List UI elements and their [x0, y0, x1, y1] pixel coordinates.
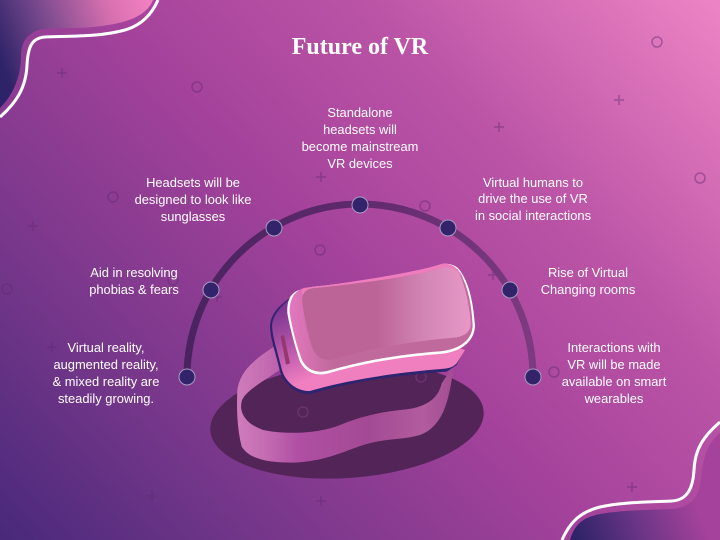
text: growth: steadily growing.	[58, 391, 154, 406]
body underside outline	[270, 289, 463, 394]
VR headset shadow	[206, 355, 488, 487]
text: sunglasses headsets	[135, 175, 251, 224]
top edge highlight	[302, 264, 463, 295]
timeline arc	[179, 197, 541, 385]
text: growth: & mixed reality are	[53, 374, 159, 389]
corner wave: top left	[0, 0, 158, 117]
visor face	[302, 267, 471, 360]
text: phobias: phobias & fears	[89, 282, 179, 297]
body side and lower strip	[272, 292, 465, 391]
shadow circles	[298, 372, 426, 417]
text: sunglasses headsets: designed to look like	[135, 192, 251, 207]
text: standalone headsets: VR devices	[327, 156, 393, 171]
text: smart wearables: available on smart	[562, 374, 667, 389]
text: changing rooms: Rise of Virtual	[548, 265, 628, 280]
text: growth: Virtual reality,	[68, 340, 144, 355]
title: Future of VR	[292, 34, 429, 60]
text: virtual humans: Virtual humans to	[483, 175, 583, 190]
text: sunglasses headsets: sunglasses	[161, 209, 225, 224]
text: phobias: Aid in resolving	[90, 265, 178, 280]
headset strap	[237, 347, 454, 463]
front bezel	[290, 264, 473, 372]
strap buckle	[281, 335, 290, 365]
text: growth: augmented reality,	[53, 357, 159, 372]
text: standalone headsets: headsets will	[323, 122, 397, 137]
text: phobias	[89, 265, 179, 297]
white rim	[287, 264, 475, 374]
text: smart wearables: Interactions with	[567, 340, 661, 355]
corner wave: bottom right	[562, 422, 720, 540]
text: smart wearables	[562, 340, 667, 406]
text: growth	[53, 340, 159, 406]
text: sunglasses headsets: Headsets will be	[146, 175, 240, 190]
icon: VR headset	[237, 264, 475, 463]
text: standalone headsets: become mainstream	[302, 139, 418, 154]
text: standalone headsets	[302, 105, 418, 171]
timeline nodes	[179, 197, 541, 385]
text: changing rooms: Changing rooms	[541, 282, 635, 297]
text: changing rooms	[541, 265, 635, 297]
text: virtual humans: drive the use of VR	[478, 191, 588, 206]
text: virtual humans: in social interactions	[475, 208, 591, 223]
text: standalone headsets: Standalone	[327, 105, 393, 120]
text: virtual humans	[475, 175, 591, 223]
text: smart wearables: wearables	[584, 391, 643, 406]
text: smart wearables: VR will be made	[567, 357, 661, 372]
